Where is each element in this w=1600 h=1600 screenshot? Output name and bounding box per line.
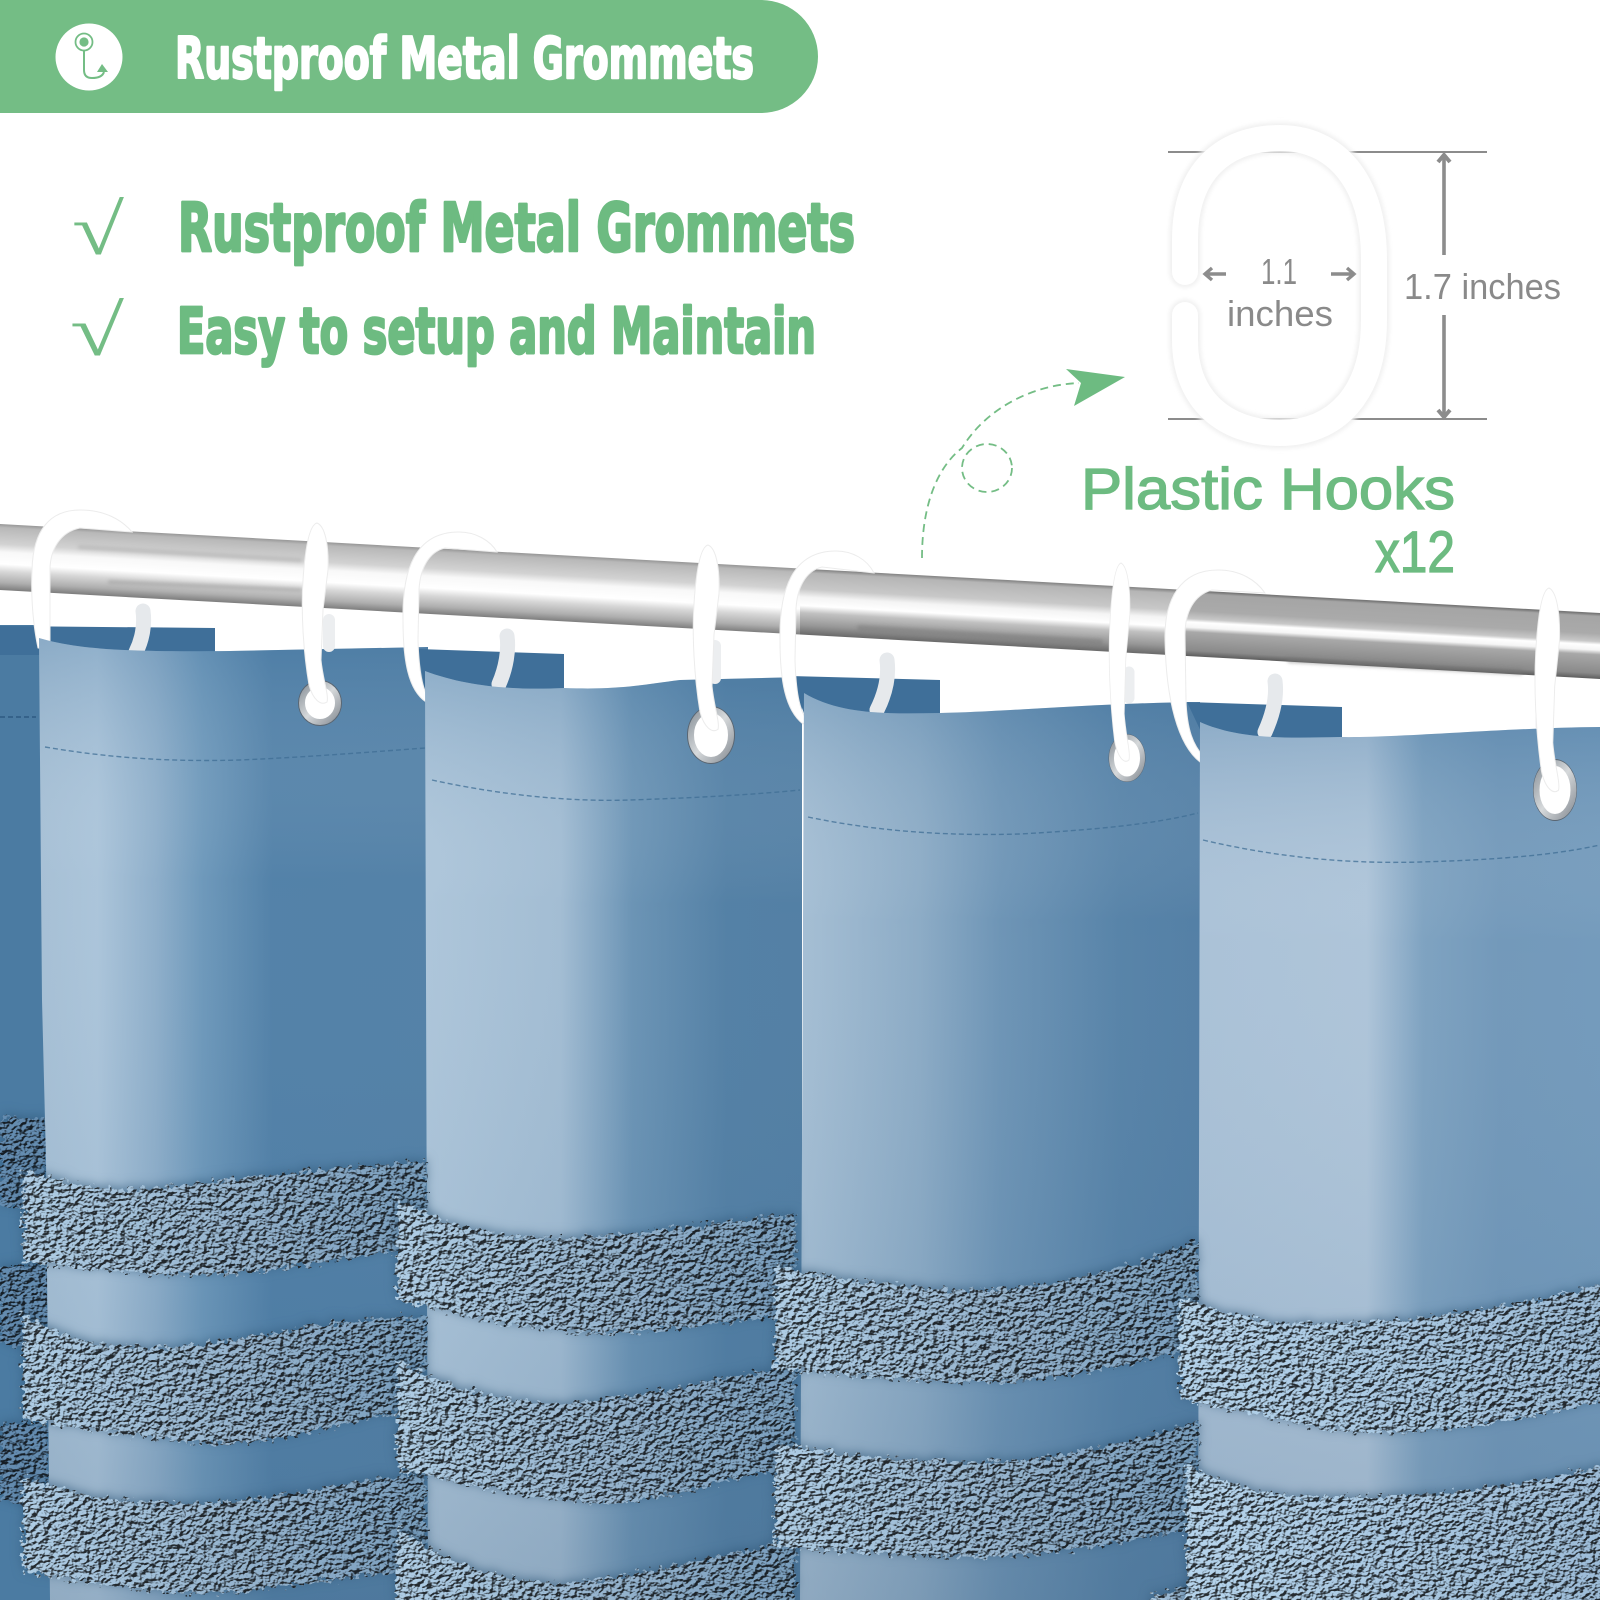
hook: ring 4 right side — [1535, 588, 1560, 792]
small hook tail 1 — [323, 620, 335, 646]
small hook tail 3 — [1124, 672, 1134, 698]
feature 2 text: Easy to setup and Maintain — [177, 295, 816, 368]
small hook tail 2 — [709, 646, 721, 678]
icon: white C-shaped plastic ring — [1185, 138, 1374, 433]
width label unit: inches — [1227, 293, 1333, 334]
far left curtain pleat — [0, 625, 50, 1600]
stitch line 3 — [808, 813, 1198, 834]
back flap 1 — [0, 626, 215, 655]
front fabric 3 — [800, 693, 1200, 1600]
inner hook 1 — [136, 611, 144, 652]
front fabric 4 — [1198, 722, 1600, 1600]
chenille tufted bands pleat 3 — [775, 1240, 1198, 1600]
hook: ring 1 left arc — [32, 510, 132, 650]
plastic hook dimension diagram — [1168, 138, 1561, 433]
grommet 3 — [1108, 734, 1146, 782]
back flap 2 — [418, 649, 564, 692]
grommet 2 — [687, 706, 735, 764]
hook: ring 2 right side — [693, 545, 719, 731]
hook: ring 2 left arc — [403, 532, 497, 702]
front fabric 2 — [425, 671, 802, 1600]
stitch line 2 — [432, 780, 800, 800]
grommet 4 — [1533, 759, 1577, 821]
plastic hooks caption: Plastic Hooks — [1081, 457, 1455, 522]
chenille tufted bands pleat 2 — [397, 1198, 795, 1600]
hook: ring 4 left arc — [1165, 570, 1265, 762]
check mark 2: √ — [70, 291, 125, 371]
hook: ring 1 right side — [302, 523, 328, 703]
width label: 1.1 — [1261, 251, 1297, 292]
dimension lines — [1168, 152, 1487, 419]
check mark 1: √ — [72, 190, 125, 270]
curtain pleat 1 with hooks and grommet — [0, 510, 428, 1600]
inner hook 2 — [499, 636, 508, 684]
chenille tufted bands pleat 4 — [1180, 1283, 1600, 1600]
chenille tufted bands pleat 1 — [23, 1162, 426, 1593]
grommet 1 — [298, 680, 342, 726]
back flap 4 — [1187, 702, 1342, 740]
hook: ring 3 left arc — [780, 551, 874, 724]
curtain pleat 3 with hooks and grommet — [780, 551, 1200, 1600]
inner hook 3 — [877, 660, 888, 710]
top banner — [0, 0, 818, 113]
feature 1 text: Rustproof Metal Grommets — [178, 189, 855, 267]
front fabric 1 — [39, 638, 428, 1600]
feature list — [70, 189, 855, 371]
hook: ring 3 right side — [1109, 563, 1130, 761]
height label: 1.7 inches — [1404, 266, 1561, 307]
plastic hooks caption — [1081, 457, 1455, 585]
small hook tail 4 — [1536, 692, 1546, 726]
inner hook 4 — [1265, 681, 1276, 732]
dashed curved arrow — [922, 369, 1125, 558]
stitch line 1 — [45, 747, 425, 760]
back flap 3 — [790, 676, 940, 716]
chrome shower rod — [0, 524, 1600, 679]
stitch line 4 — [1203, 840, 1600, 862]
curtain pleat 4 with hooks and grommet — [1165, 570, 1600, 1600]
banner title: Rustproof Metal Grommets — [175, 26, 754, 92]
curtain pleat 2 with hooks and grommet — [403, 532, 802, 1600]
quantity: x12 — [1375, 520, 1455, 585]
icon: hook on grommet — [56, 24, 122, 90]
